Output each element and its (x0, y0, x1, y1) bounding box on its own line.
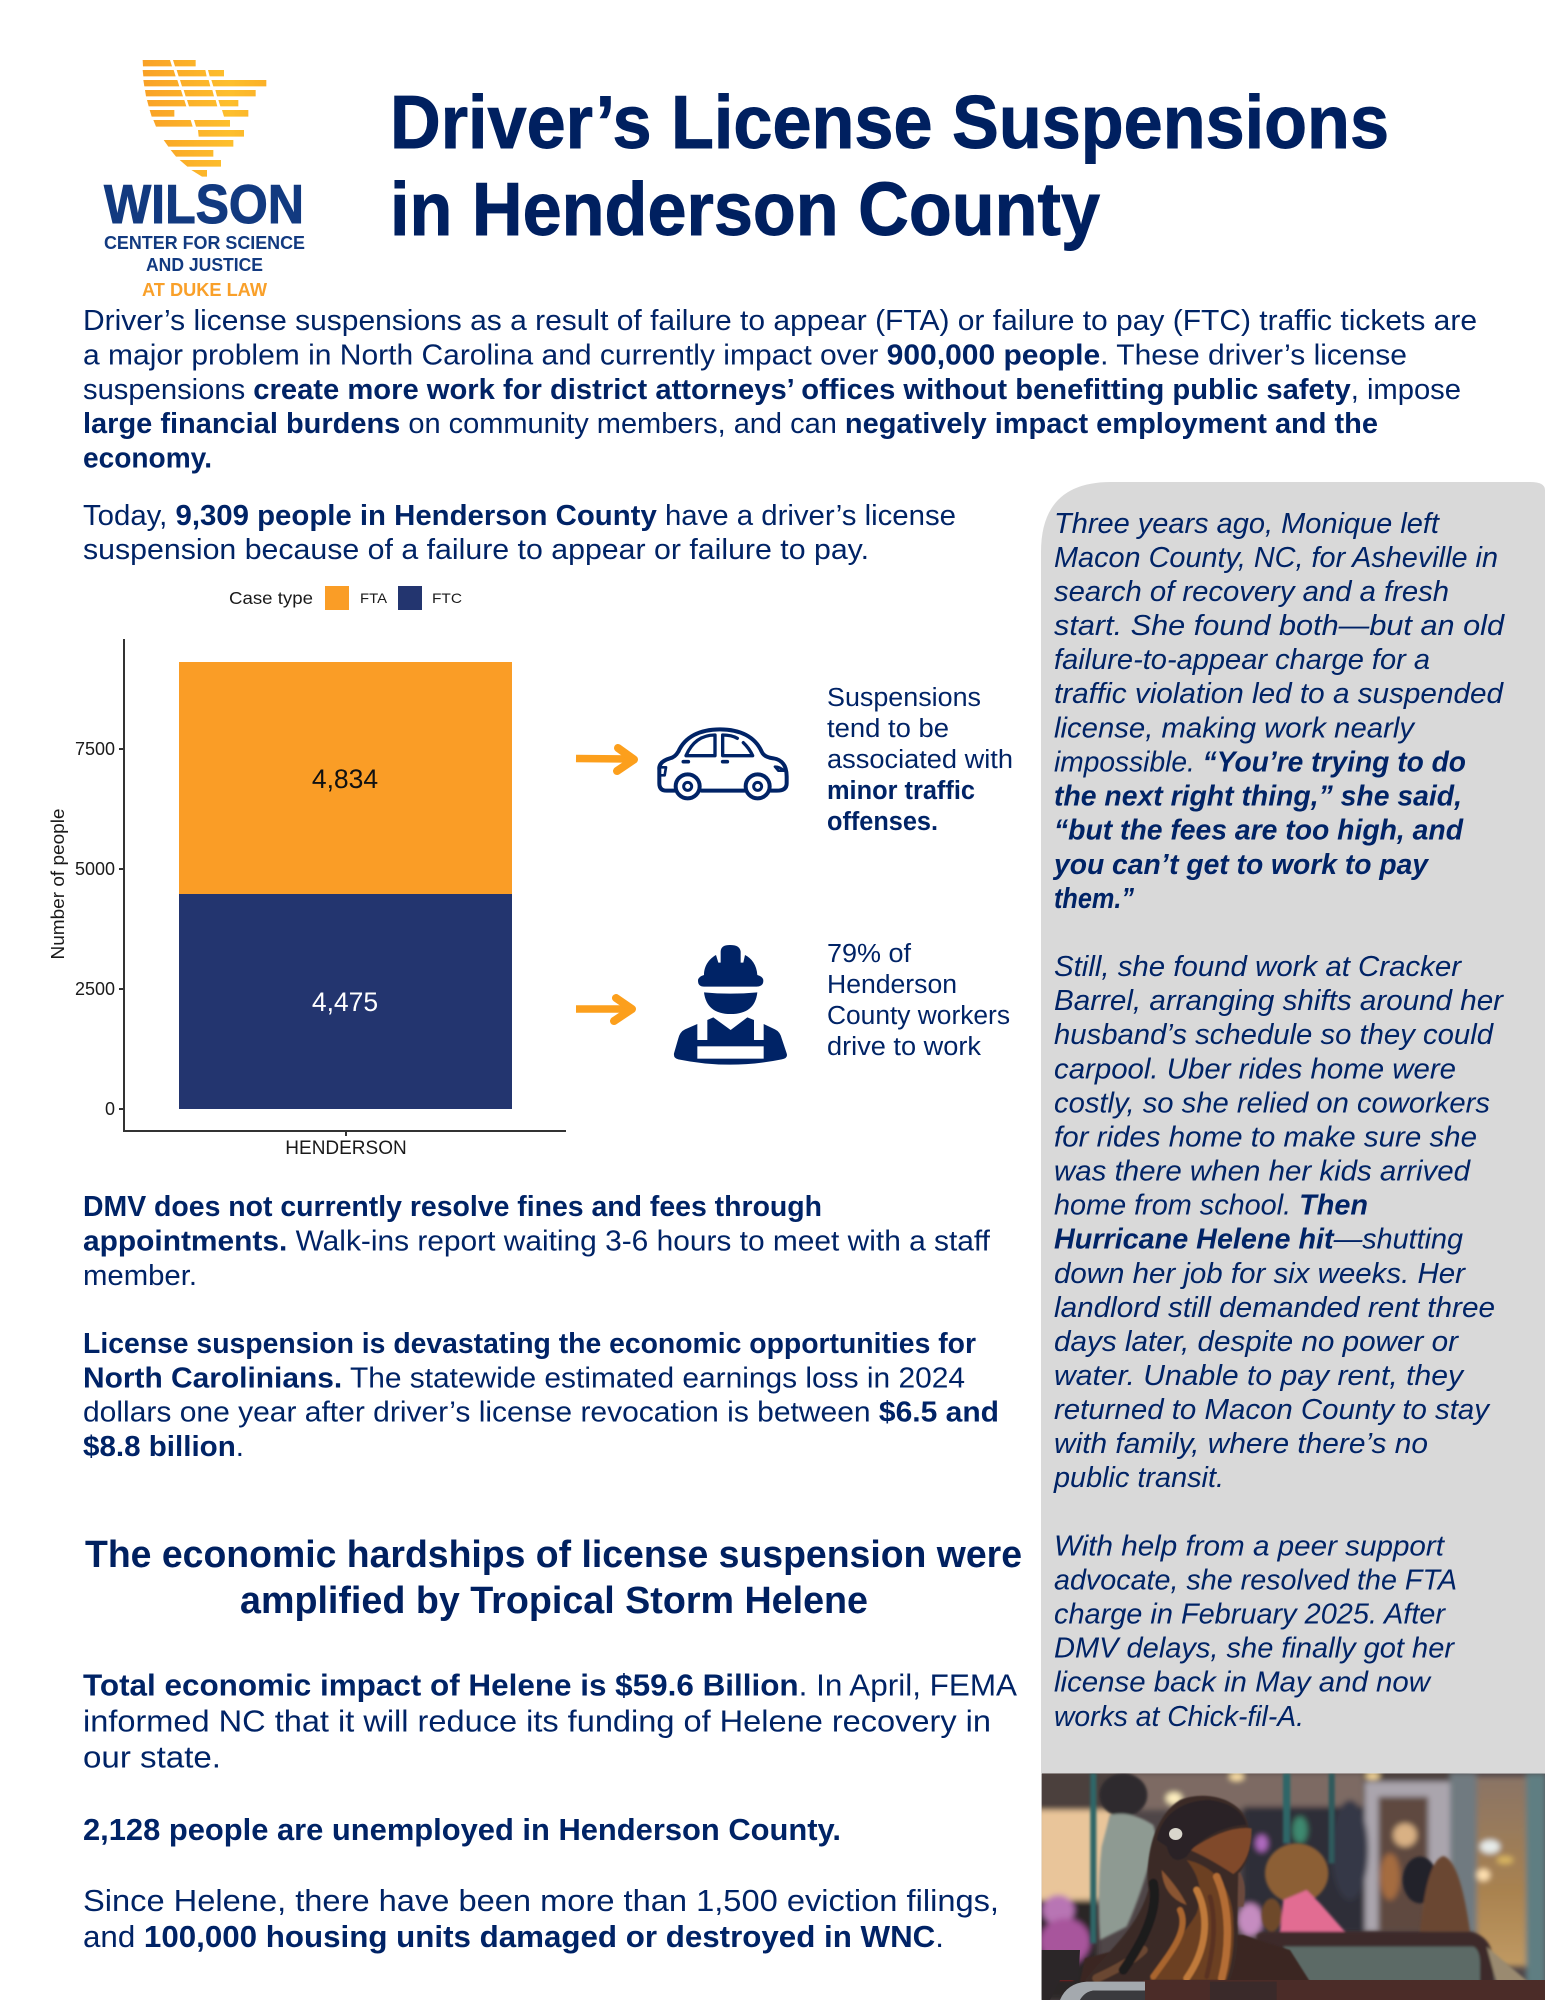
story paragraph 2 (1053, 951, 1505, 1494)
story paragraph 1: failure-to-appear charge for a (1054, 644, 1430, 676)
stacked bar chart (48, 586, 566, 1159)
story paragraph 2: water. Unable to pay rent, they (1054, 1360, 1465, 1392)
story paragraph 1: impossible. “You’re trying to do (1054, 746, 1466, 778)
panel background (1041, 482, 1545, 1773)
chart legend: Case type (229, 588, 313, 608)
text: DMV appointments: DMV does not currently resolve fines and fees through (83, 1191, 822, 1223)
text: economic impact of Helene: our state. (83, 1740, 221, 1774)
text: evictions and housing: Since Helene, there have been more than 1,500 eviction filings, (83, 1884, 999, 1918)
story paragraph 1: Macon County, NC, for Asheville in (1054, 542, 1498, 574)
story paragraph 2: public transit. (1053, 1462, 1224, 1494)
story paragraph 2: with family, where there’s no (1054, 1428, 1428, 1460)
text: economic opportunities: North Carolinians. The statewide estimated earnings loss in 2024 (83, 1362, 965, 1394)
y-axis tick labels (75, 739, 115, 1119)
text: unemployment: 2,128 people are unemployed in Henderson County. (83, 1813, 841, 1847)
text: minor traffic offenses: Suspensions (827, 684, 981, 712)
story paragraph 2: for rides home to make sure she (1054, 1121, 1477, 1153)
text: minor traffic offenses: associated with (827, 746, 1013, 774)
title (390, 80, 1389, 251)
story paragraph 3: charge in February 2025. After (1054, 1599, 1447, 1631)
photo: woman riding a bus (1037, 1770, 1545, 2000)
story paragraph 3: advocate, she resolved the FTA (1054, 1564, 1457, 1596)
chart axes (119, 639, 566, 1136)
intro paragraph: a major problem in North Carolina and currently impact over 900,000 people . These driver’s license (83, 339, 1407, 371)
story paragraph 2: was there when her kids arrived (1054, 1156, 1471, 1188)
intro paragraph: Driver’s license suspensions as a result of failure to appear (FTA) or failure to pay (FTC) traffic tickets are (83, 305, 1477, 337)
x-axis label: HENDERSON (285, 1138, 407, 1159)
intro paragraph (83, 305, 1477, 475)
text: economic opportunities (83, 1328, 999, 1463)
icon: construction worker (674, 945, 787, 1065)
logo: Wilson Center for Science and Justice (104, 60, 305, 300)
logo mark: stacked orange bars (143, 60, 266, 177)
y-axis tick labels: 7500 (75, 739, 115, 759)
story paragraph 2: Hurricane Helene hit—shutting (1054, 1224, 1463, 1256)
heading: Tropical Storm Helene: amplified by Tropical Storm Helene (240, 1580, 868, 1622)
title: Driver’s License Suspensions (390, 80, 1389, 164)
story paragraph 1: license, making work nearly (1054, 712, 1416, 744)
story paragraph 3 (1054, 1530, 1457, 1733)
text: economic opportunities: dollars one year after driver’s license revocation is between $6.5 and (83, 1396, 999, 1428)
text: DMV appointments (83, 1191, 990, 1292)
value label: FTC: 4,475 (312, 987, 378, 1017)
story paragraph 1: them.” (1054, 883, 1135, 915)
bar segment: FTA (179, 662, 512, 894)
story paragraph 1 (1052, 508, 1505, 915)
story paragraph 3: DMV delays, she finally got her (1054, 1633, 1456, 1665)
logo subtitle: CENTER FOR SCIENCE (104, 232, 305, 253)
y-axis title: Number of people (48, 808, 68, 960)
story paragraph 1: start. She found both—but an old (1054, 610, 1505, 642)
text: economic impact of Helene (83, 1668, 1018, 1774)
story paragraph 2: landlord still demanded rent three (1054, 1292, 1495, 1324)
intro paragraph: large financial burdens on community members, and can negatively impact employment and the (83, 408, 1378, 440)
text: economic opportunities: $8.8 billion. (83, 1431, 244, 1463)
chart legend (229, 586, 462, 610)
story paragraph 2: returned to Macon County to stay (1054, 1394, 1491, 1426)
logo subtitle (104, 232, 305, 300)
story paragraph 1: you can’t get to work to pay (1052, 849, 1430, 881)
text: economic impact of Helene: Total economic impact of Helene is $59.6 Billion . In April, FEMA (83, 1668, 1018, 1702)
chart legend: FTC (432, 590, 462, 606)
y-axis tick labels: 0 (105, 1099, 115, 1119)
arrow to worker (576, 998, 632, 1021)
story paragraph 1: search of recovery and a fresh (1054, 576, 1449, 608)
story paragraph 2: Barrel, arranging shifts around her (1054, 985, 1505, 1017)
intro paragraph: suspensions create more work for district attorneys’ offices without benefitting public safety , impose (83, 374, 1461, 406)
Henderson County statement: Today, 9,309 people in Henderson County have a driver’s license (83, 500, 956, 532)
text: minor traffic offenses: offenses. (827, 808, 938, 836)
value label: FTA: 4,834 (312, 764, 378, 794)
text: workers drive to work: 79% of (827, 940, 912, 968)
story paragraph 2: home from school. Then (1054, 1190, 1368, 1222)
text: evictions and housing: and 100,000 housing units damaged or destroyed in WNC . (83, 1920, 944, 1954)
chart legend: FTA (360, 590, 388, 606)
text: workers drive to work: Henderson (827, 971, 957, 999)
story paragraph 2: carpool. Uber rides home were (1054, 1053, 1456, 1085)
story paragraph 2: costly, so she relied on coworkers (1054, 1087, 1490, 1119)
story paragraph 1: “but the fees are too high, and (1054, 815, 1464, 847)
story paragraph 1: traffic violation led to a suspended (1054, 678, 1504, 710)
text: DMV appointments: member. (83, 1260, 197, 1292)
text: workers drive to work (827, 940, 1010, 1061)
heading: Tropical Storm Helene (85, 1534, 1022, 1622)
text: economic opportunities: License suspension is devastating the economic opportunities for (83, 1328, 976, 1360)
story paragraph 2: days later, despite no power or (1054, 1326, 1460, 1358)
text: economic impact of Helene: informed NC that it will reduce its funding of Helene recovery in (83, 1704, 991, 1738)
story paragraph 3: license back in May and now (1054, 1667, 1432, 1699)
text: DMV appointments: appointments. Walk-ins report waiting 3-6 hours to meet with a staff (83, 1226, 990, 1258)
heading: Tropical Storm Helene: The economic hardships of license suspension were (85, 1534, 1022, 1576)
Henderson County statement (83, 500, 956, 566)
story paragraph 3: works at Chick-fil-A. (1054, 1701, 1304, 1733)
title: in Henderson County (390, 167, 1100, 251)
y-axis tick labels: 5000 (75, 859, 115, 879)
Henderson County statement: suspension because of a failure to appear or failure to pay. (83, 534, 869, 566)
logo subtitle: AND JUSTICE (146, 254, 263, 275)
intro paragraph: economy. (83, 443, 212, 475)
text: minor traffic offenses: tend to be (827, 715, 949, 743)
story paragraph 2: husband’s schedule so they could (1054, 1019, 1494, 1051)
text: minor traffic offenses (827, 684, 1013, 836)
text: workers drive to work: County workers (827, 1002, 1010, 1030)
story paragraph 1: Three years ago, Monique left (1054, 508, 1440, 540)
arrow to car (576, 748, 634, 771)
story paragraph 3: With help from a peer support (1054, 1530, 1445, 1562)
logo wordmark: WILSON (104, 175, 304, 236)
panel: Monique's story (1041, 482, 1545, 1773)
icon: car (659, 729, 787, 798)
text: minor traffic offenses: minor traffic (827, 777, 975, 805)
logo subtitle: AT DUKE LAW (142, 279, 268, 300)
story paragraph 2: down her job for six weeks. Her (1054, 1258, 1467, 1290)
text: workers drive to work: drive to work (827, 1033, 981, 1061)
story paragraph 1: the next right thing,” she said, (1054, 781, 1462, 813)
y-axis tick labels: 2500 (75, 979, 115, 999)
story paragraph 2: Still, she found work at Cracker (1054, 951, 1463, 983)
bar segment: FTC (179, 894, 512, 1109)
text: evictions and housing (83, 1884, 999, 1954)
